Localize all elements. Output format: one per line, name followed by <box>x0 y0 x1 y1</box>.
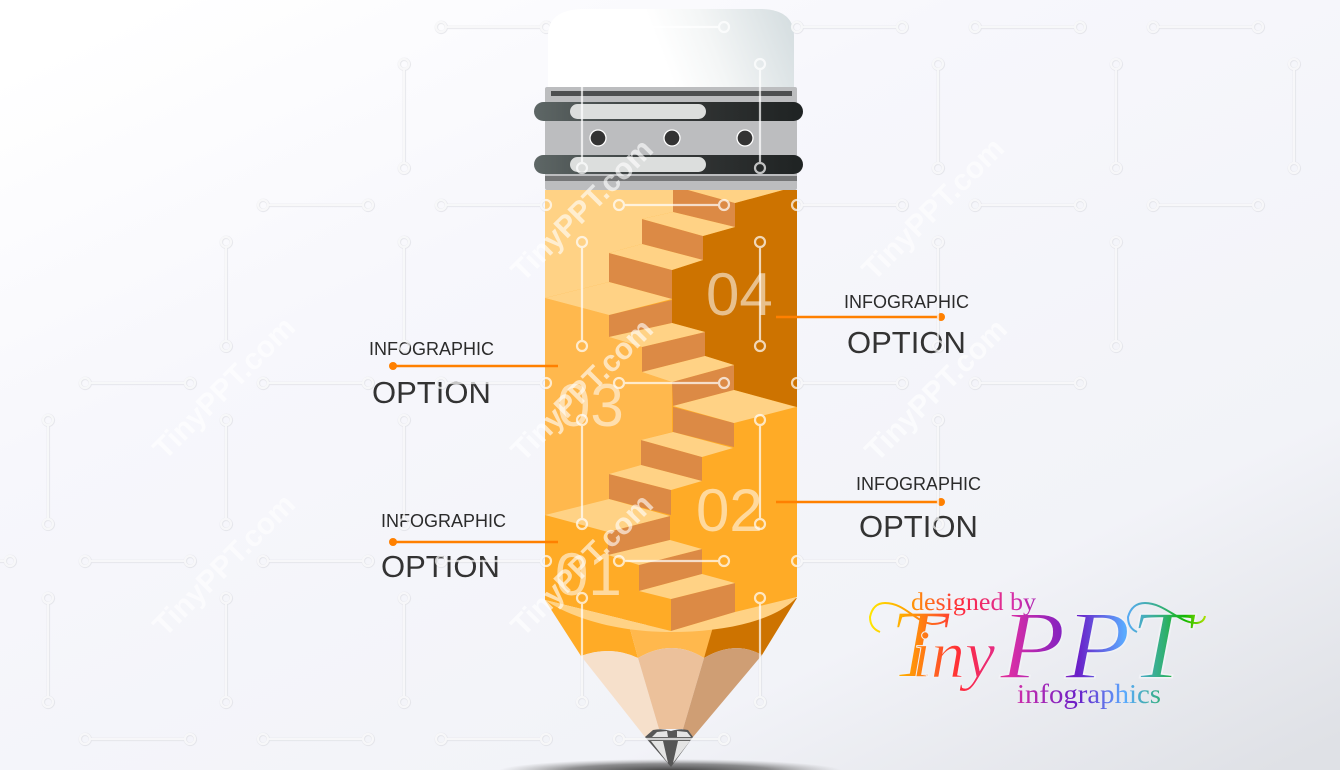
callout: option 03: OPTION <box>372 375 491 410</box>
watermarks: TinyPPT.com <box>505 313 660 468</box>
pencil cone <box>545 598 797 658</box>
callout: option 04: OPTION <box>847 325 966 360</box>
logo: designed by TinyPPT infographics: iny <box>912 616 996 692</box>
logo: designed by TinyPPT infographics: PPT <box>999 592 1197 700</box>
callout: option 02 <box>776 474 981 544</box>
pencil <box>534 9 803 767</box>
logo: designed by TinyPPT infographics: T <box>890 591 951 699</box>
watermarks: TinyPPT.com <box>505 488 660 643</box>
watermarks: TinyPPT.com <box>856 132 1011 287</box>
callout: option 03 <box>369 339 558 410</box>
watermarks: TinyPPT.com <box>147 488 302 643</box>
callout: option 04: INFOGRAPHIC <box>844 292 969 312</box>
number 01: 01 <box>555 541 622 608</box>
pencil wood tip <box>581 648 762 737</box>
watermarks: TinyPPT.com <box>147 311 302 466</box>
callout: option 03: INFOGRAPHIC <box>369 339 494 359</box>
ground shadow <box>498 759 842 770</box>
callout: option 04 <box>776 292 969 360</box>
logo: designed by TinyPPT infographics <box>870 589 1205 709</box>
watermarks: TinyPPT.com <box>505 133 660 288</box>
pencil collar band <box>545 597 797 632</box>
number 03: 03 <box>557 372 624 439</box>
callout: option 01 <box>381 511 558 584</box>
number 04: 04 <box>706 261 773 328</box>
callout: option 01: INFOGRAPHIC <box>381 511 506 531</box>
metal ferrule <box>534 87 803 190</box>
number 02: 02 <box>696 477 763 544</box>
watermarks: TinyPPT.com <box>859 313 1014 468</box>
eraser <box>548 9 794 88</box>
logo: designed by TinyPPT infographics: designed by <box>911 589 1037 616</box>
pencil lead <box>645 729 693 767</box>
pencil body <box>545 190 797 631</box>
callout: option 01: OPTION <box>381 549 500 584</box>
staircase <box>545 190 796 631</box>
callout: option 02: OPTION <box>859 509 978 544</box>
callout: option 02: INFOGRAPHIC <box>856 474 981 494</box>
watermarks <box>147 132 1014 643</box>
logo: designed by TinyPPT infographics: infographics <box>1017 679 1161 709</box>
